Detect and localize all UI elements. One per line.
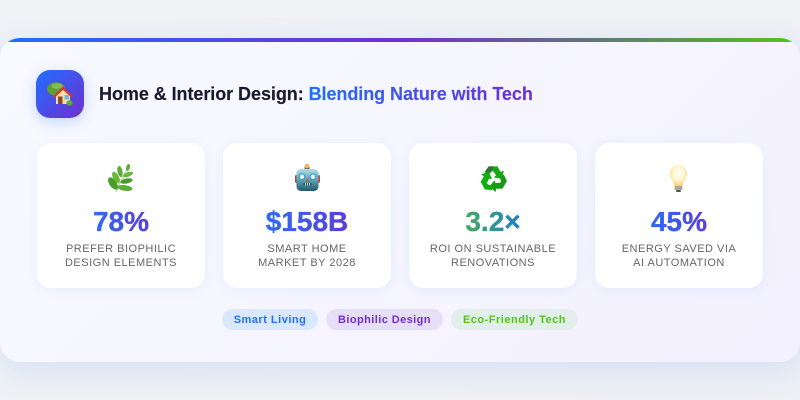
stat card: energy <box>595 143 763 288</box>
stat label: RENOVATIONS <box>451 257 535 269</box>
stat value: $158B <box>266 206 348 237</box>
stat card: smart home <box>223 143 391 288</box>
tag: eco-friendly tech <box>451 309 578 330</box>
icon: house with tree <box>36 70 84 118</box>
icon: robot <box>295 164 320 191</box>
tag: biophilic design: Biophilic Design <box>338 314 431 326</box>
top gradient bar <box>0 38 800 42</box>
stat label <box>258 243 356 269</box>
stat label: PREFER BIOPHILIC <box>66 243 176 255</box>
icon: recycle <box>480 166 507 192</box>
icon: herb <box>108 164 134 192</box>
stat card: sustainable <box>409 143 577 288</box>
tag: eco-friendly tech: Eco-Friendly Tech <box>463 314 566 326</box>
stat label: AI AUTOMATION <box>633 257 725 269</box>
title: Home & Interior Design: Blending Nature with Tech <box>99 84 533 104</box>
stat label <box>622 243 736 269</box>
tag: biophilic design <box>326 309 443 330</box>
stat value: 78% <box>93 206 149 237</box>
stat value: 3.2× <box>465 206 521 237</box>
stat label: DESIGN ELEMENTS <box>65 257 177 269</box>
tag: smart living: Smart Living <box>234 314 306 326</box>
stat card: biophilic <box>37 143 205 288</box>
stat label <box>65 243 177 269</box>
tag: smart living <box>222 309 318 330</box>
stat label: MARKET BY 2028 <box>258 257 356 269</box>
stat label: SMART HOME <box>267 243 347 255</box>
stat label: ROI ON SUSTAINABLE <box>430 243 556 255</box>
icon: light bulb <box>670 165 687 192</box>
stat label: ENERGY SAVED VIA <box>622 243 736 255</box>
stat value: 45% <box>651 206 707 237</box>
stat label <box>430 243 556 269</box>
